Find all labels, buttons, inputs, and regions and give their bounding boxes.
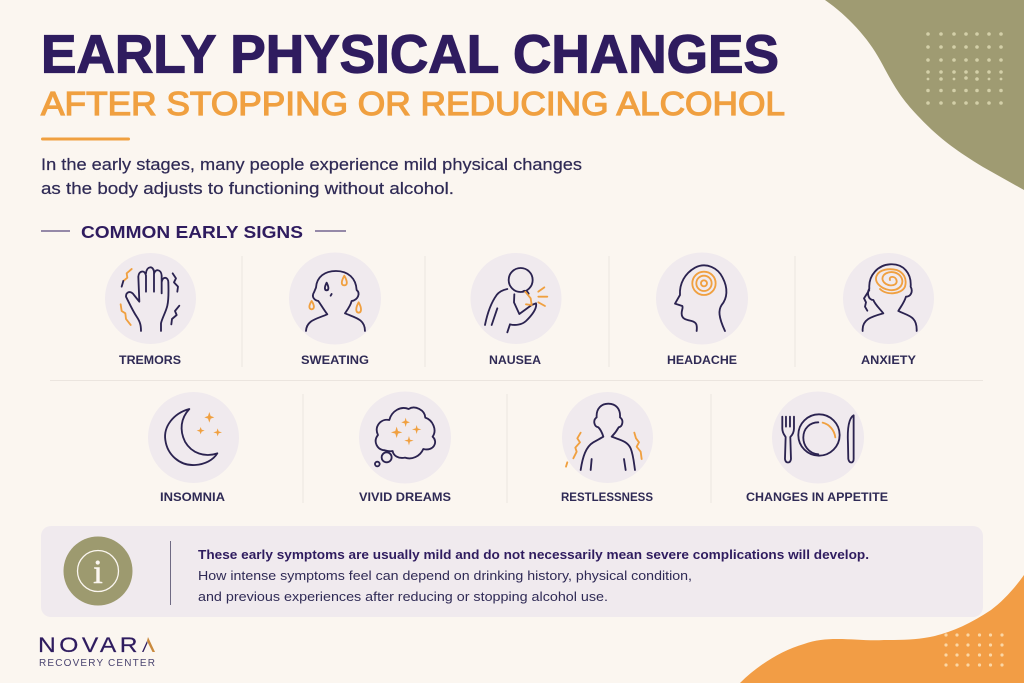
- panel: information note: [41, 526, 983, 617]
- tremors item: [105, 253, 196, 367]
- label: nausea: NAUSEA: [489, 353, 541, 367]
- icon: thought cloud with stars: [375, 408, 435, 466]
- label: vivid dreams: VIVID DREAMS: [359, 490, 451, 504]
- icon: restless person: [566, 404, 642, 470]
- note text: [198, 547, 869, 604]
- icon: sweating head: [306, 271, 365, 331]
- olive corner blob: [825, 0, 1024, 190]
- icon: head with target: [675, 265, 726, 331]
- vivid dreams item: [359, 392, 451, 504]
- label: sweating: SWEATING: [301, 353, 369, 367]
- icon: shaking hand: [121, 267, 179, 331]
- icon: plate fork and knife: [782, 414, 854, 462]
- nausea item: [470, 253, 562, 367]
- label: anxiety: ANXIETY: [861, 353, 916, 367]
- section heading: common early signs: COMMON EARLY SIGNS: [81, 222, 303, 242]
- icon: crescent moon and stars: [165, 409, 222, 465]
- headache item: [656, 252, 748, 367]
- intro paragraph: In the early stages, many people experience mild physical changes: [41, 156, 582, 174]
- title: EARLY PHYSICAL CHANGES: [41, 24, 779, 84]
- intro paragraph: as the body adjusts to functioning without alcohol.: [41, 180, 454, 198]
- logo: Novara Recovery Center: RECOVERY CENTER: [39, 658, 155, 669]
- icon: person coughing: [485, 268, 547, 332]
- sweating item: [289, 252, 381, 367]
- logo: Novara Recovery Center: [38, 634, 155, 669]
- label: tremors: TREMORS: [119, 353, 181, 367]
- icon: head with spiral: [863, 264, 917, 331]
- icon: info circle: [64, 536, 132, 606]
- label: changes in appetite: CHANGES IN APPETITE: [746, 490, 888, 504]
- orange corner blob: [740, 575, 1024, 683]
- icon: info circle: i: [93, 554, 103, 591]
- subtitle: AFTER STOPPING OR REDUCING ALCOHOL: [41, 85, 785, 122]
- label: headache: HEADACHE: [667, 353, 737, 367]
- note text: These early symptoms are usually mild and do not necessarily mean severe complications will develop.: [198, 547, 869, 562]
- label: insomnia: INSOMNIA: [160, 490, 225, 504]
- changes in appetite item: [746, 392, 888, 504]
- anxiety item: [843, 253, 934, 367]
- label: restlessness: RESTLESSNESS: [561, 490, 653, 504]
- logo: Novara Recovery Center: NOVAR: [38, 634, 141, 657]
- note text: How intense symptoms feel can depend on drinking history, physical condition,: [198, 568, 692, 583]
- insomnia item: [148, 392, 239, 504]
- accent rule: [41, 138, 130, 140]
- intro paragraph: [41, 156, 582, 198]
- restlessness item: [561, 392, 653, 504]
- note text: and previous experiences after reducing or stopping alcohol use.: [198, 589, 608, 604]
